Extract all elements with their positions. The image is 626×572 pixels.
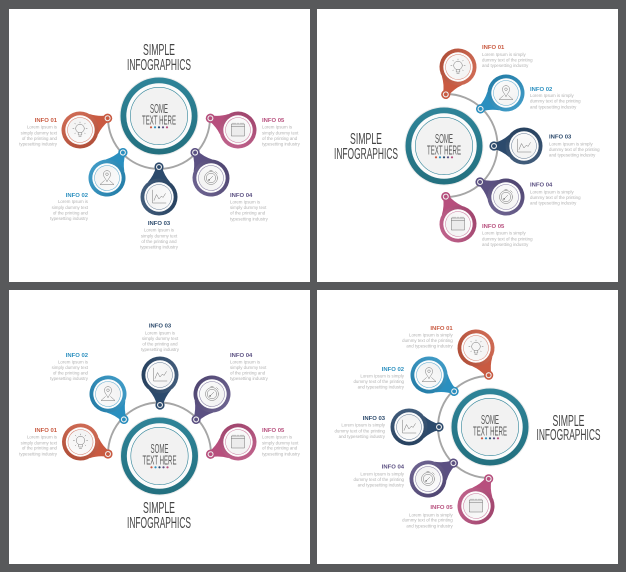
node: info 05 [451,467,507,531]
text: info 01 [482,45,533,68]
text: info 04 [353,465,405,488]
text: info 04: simply dummy text [230,205,267,210]
panel: bottom-right radial layout [317,290,618,564]
text: info 01 [402,326,454,348]
text: info 03: INFO 03 [149,324,172,330]
text: info 05: of the printing and [262,136,298,141]
text: info 02: of the printing and [53,370,89,376]
text: info 02 [50,353,89,381]
central circle: SOME [435,132,453,146]
text: info 03: simply dummy text [141,233,178,238]
text: info 03 [549,135,600,158]
text: info 01: simply dummy text [21,130,58,135]
text: info 05: and typesetting industry [406,524,454,528]
text: info 05: INFO 05 [482,224,505,230]
text: info 02: Lorem Ipsum is simply [360,374,405,378]
text: info 05: INFO 05 [262,118,285,124]
panel: bottom-left radial layout [9,290,310,564]
connector arc [108,402,211,454]
text: info 02: Lorem Ipsum is [58,199,89,204]
central circle [404,106,484,186]
text: info 05: Lorem Ipsum is [262,434,293,440]
text: info 03: simply dummy text [142,336,179,341]
text: info 01: Lorem Ipsum is simply [482,52,526,57]
text: info 04 [230,193,269,222]
text: info 02: Lorem Ipsum is [58,360,89,364]
text: info 05 [402,505,454,528]
text: info 02: simply dummy text [52,205,89,210]
text: info 01: of the printing and [22,446,58,451]
text: info 04: INFO 04 [530,183,553,189]
text: info 03: INFO 03 [549,135,572,141]
text: info 03: typesetting industry [140,244,179,250]
text: info 02: INFO 02 [382,367,405,373]
text: info 04: Lorem Ipsum is simply [530,190,574,194]
text: info 01: INFO 01 [35,428,58,434]
panel: top-right radial layout [317,9,618,282]
text: info 04: INFO 04 [230,193,253,199]
text: info 04: typesetting industry [230,376,269,381]
node: info 01 [427,43,482,106]
central circle: SOME [481,413,499,427]
text: info 05: INFO 05 [430,505,453,511]
text: info 04: typesetting industry [230,216,269,222]
node: info 03 [390,408,444,446]
node: info 01 [451,323,507,387]
text: info 02: INFO 02 [66,193,89,199]
text: info 03 [334,416,386,439]
text: info 01: simply dummy text [21,440,58,445]
text: info 02: INFO 02 [66,353,89,359]
connector arc [446,94,498,197]
text: info 02: typesetting industry [50,216,89,221]
central circle [120,76,198,156]
text: info 03: Lorem Ipsum is simply [549,142,593,146]
text: info 02: Lorem Ipsum is simply [530,93,574,98]
node: info 03 [489,128,542,164]
text: info 03: and typesetting industry [339,434,386,439]
text: info 04: Lorem Ipsum is simply [360,472,405,476]
central circle: TEXT HERE [142,114,176,128]
title: SIMPLE [143,42,175,59]
central circle [450,388,530,466]
text: info 02: and typesetting industry [358,384,405,390]
text: info 04: dummy text of the printing [530,195,581,200]
text: info 05: dummy text of the printing [402,518,453,522]
text: info 03: INFO 03 [148,221,171,227]
central circle [120,416,199,496]
text: info 01: and typesetting industry [482,63,529,68]
text: info 02: dummy text of the printing [530,98,581,104]
text: info 03: dummy text of the printing [549,147,600,152]
text: info 01: of the printing and [22,136,58,141]
text: info 05 [262,428,301,456]
text: info 01: and typesetting industry [406,344,454,348]
node: info 03 [142,356,178,410]
text: info 05: typesetting industry [262,452,301,456]
text: info 04: dummy text of the printing [353,477,405,482]
text: info 02 [530,87,581,109]
text: info 05: Lorem Ipsum is simply [482,230,526,236]
text: info 01: INFO 01 [482,45,505,51]
text: info 01 [19,428,58,456]
text: info 05 [482,224,533,247]
text: info 04: Lorem Ipsum is [230,360,261,364]
node: info 04 [178,369,237,433]
node: info 01 [56,99,119,154]
text: info 03 [140,221,179,250]
central circle: SOME [150,442,168,456]
text: info 04: of the printing and [230,210,266,216]
text: info 01: INFO 01 [430,326,453,332]
text: info 05: simply dummy text [262,440,299,445]
text: info 04: of the printing and [230,370,266,376]
text: info 03: dummy text of the printing [334,428,386,434]
text: info 04: and typesetting industry [530,200,577,206]
node: info 04 [403,445,467,504]
text: info 03: of the printing and [141,239,177,244]
text: info 04: simply dummy text [230,365,267,370]
text: info 01 [19,118,58,146]
connector arc [438,376,489,478]
text: info 02: typesetting industry [50,376,89,381]
text: info 03: Lorem Ipsum is [144,228,175,232]
text: info 01: typesetting industry [19,142,58,146]
text: info 04: INFO 04 [230,353,253,359]
title: INFOGRAPHICS [334,146,398,163]
text: info 05: typesetting industry [262,142,301,146]
text: info 01: Lorem Ipsum is [27,124,58,130]
text: info 03: of the printing and [142,342,178,346]
connector arc [108,118,210,169]
node: info 02 [83,369,142,433]
text: info 03 [141,324,180,352]
title [334,131,398,163]
node: info 02 [403,349,468,409]
central circle: TEXT HERE [142,454,176,468]
text: info 02: of the printing and [53,210,89,216]
title: SIMPLE [143,500,175,517]
central circle: SOME [150,102,168,116]
title [127,42,191,74]
text: info 01: Lorem Ipsum is [27,434,58,440]
text: info 02: INFO 02 [530,87,553,93]
text: info 05: Lorem Ipsum is [262,124,293,130]
text: info 01: dummy text of the printing [402,338,453,343]
text: info 03: and typesetting industry [549,152,596,158]
text: info 01: INFO 01 [35,118,58,124]
node: info 03 [140,162,178,216]
text: info 01: dummy text of the printing [482,58,533,62]
text: info 03: INFO 03 [363,416,386,422]
node: info 02 [467,68,531,127]
text: info 04 [530,183,581,206]
text: info 02 [353,367,405,390]
text: info 02: simply dummy text [52,365,89,370]
text: info 05: INFO 05 [262,428,285,434]
text: info 05: dummy text of the printing [482,236,533,242]
text: info 04 [230,353,269,381]
title [127,500,191,532]
text: info 04: and typesetting industry [358,482,405,488]
node: info 04 [467,164,531,222]
node: info 02 [82,139,141,203]
text: info 01: typesetting industry [19,452,58,456]
central circle: TEXT HERE [427,144,461,158]
text: info 05: and typesetting industry [482,242,529,247]
node: info 05 [199,99,262,154]
node: info 01 [56,418,120,473]
title: SIMPLE [350,131,382,148]
text: info 02: and typesetting industry [530,104,577,109]
node: info 04 [177,139,236,203]
text: info 05: simply dummy text [262,130,299,135]
central circle: TEXT HERE [473,424,507,438]
title: INFOGRAPHICS [127,57,191,74]
node: info 05 [427,185,482,248]
title [536,413,600,444]
text: info 01: Lorem Ipsum is simply [409,332,453,338]
text: info 04: INFO 04 [382,465,405,471]
panel: top-left radial layout [9,9,310,282]
title: SIMPLE [552,413,584,430]
text: info 03: Lorem Ipsum is [145,330,176,336]
title: INFOGRAPHICS [127,515,191,532]
node: info 05 [199,418,262,473]
text: info 05: Lorem Ipsum is simply [409,512,453,518]
text: info 05: of the printing and [262,446,298,451]
text: info 02 [50,193,89,221]
text: info 04: Lorem Ipsum is [230,200,261,204]
text: info 03: typesetting industry [141,347,180,352]
text: info 05 [262,118,301,146]
text: info 02: dummy text of the printing [353,379,405,384]
text: info 03: Lorem Ipsum is simply [341,422,386,428]
